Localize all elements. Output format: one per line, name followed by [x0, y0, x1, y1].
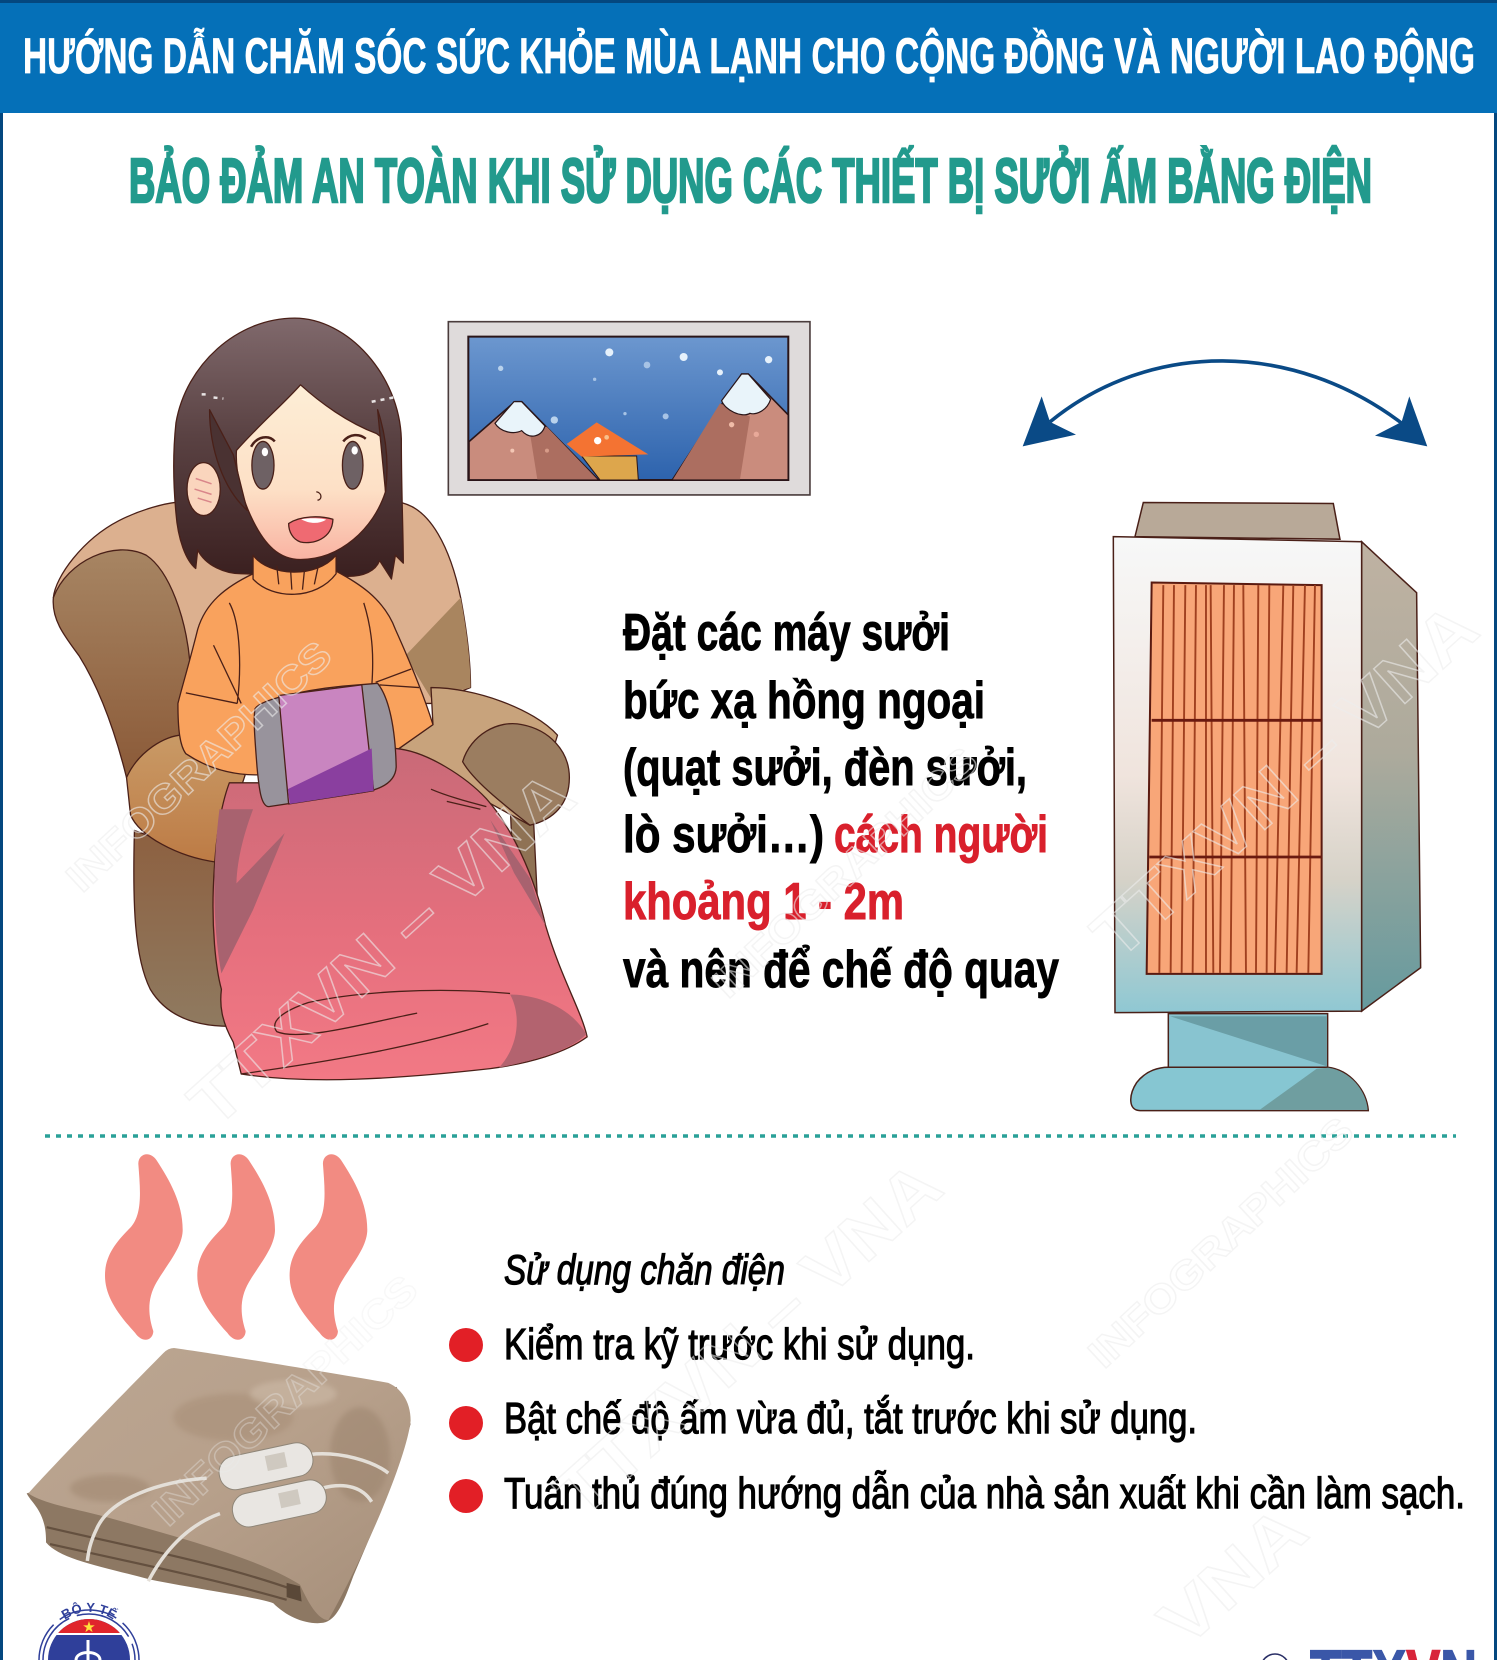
snow dots [498, 348, 772, 424]
list heading: Sử dụng chăn điện [504, 1246, 785, 1293]
icon: heat waves [105, 1154, 367, 1340]
watermarks: INFOGRAPHICS [58, 633, 340, 901]
woman [174, 318, 433, 775]
item 1: Kiểm tra kỹ trước khi sử dụng. [504, 1320, 975, 1369]
wall painting [448, 322, 810, 495]
mouth [289, 517, 333, 543]
instruction list: electric blanket [449, 1246, 1465, 1518]
instruction text: infrared heaters: cách người [834, 806, 1048, 864]
watermarks: INFOGRAPHICS [704, 739, 986, 1007]
logo: Bo Y Te: BỘ Y TẾ [61, 1602, 118, 1620]
instruction text: infrared heaters: Đặt các máy sưởi [623, 604, 950, 662]
hand warmer muff [254, 683, 396, 807]
logo: Bo Y Te: ★ [82, 1619, 96, 1636]
header banner [0, 0, 1497, 113]
instruction text: infrared heaters: lò sưởi…) [623, 806, 824, 864]
item 2: Bật chế độ ấm vừa đủ, tắt trước khi sử dụng. [504, 1394, 1197, 1443]
instruction text: infrared heaters: khoảng 1 - 2m [623, 873, 904, 931]
watermarks: TTXVN – VNA [174, 757, 589, 1141]
watermarks: TTXVN – VNA [541, 1147, 956, 1531]
instruction text: infrared heaters [623, 604, 1059, 999]
house [582, 456, 638, 480]
instruction text: infrared heaters: và nên để chế độ quay [623, 941, 1059, 999]
armchair [53, 502, 569, 1026]
watermarks [58, 589, 1492, 1660]
illustration: infrared heater [1113, 502, 1421, 1111]
rotation arrow [1023, 361, 1427, 446]
blanket on lap [213, 748, 587, 1080]
photo: electric blanket with controllers [27, 1348, 411, 1623]
logo: Bo Y Te [38, 1602, 140, 1660]
watermarks: TTXVN – VNA [1077, 589, 1492, 973]
controllers [216, 1440, 329, 1530]
instruction text: infrared heaters: bức xạ hồng ngoại [623, 672, 985, 730]
controller cords [87, 1454, 388, 1581]
illustration: woman on armchair with blanket [53, 318, 587, 1080]
right mountain [672, 374, 788, 480]
instruction text: infrared heaters: (quạt sưởi, đèn sưởi, [623, 739, 1027, 797]
watermarks: VNA [1144, 1491, 1321, 1660]
eyes [252, 441, 274, 489]
logo: TTXVN [1262, 1650, 1474, 1660]
watermarks: INFOGRAPHICS [1080, 1109, 1362, 1377]
stand [1168, 1014, 1328, 1067]
heater grill [1147, 583, 1322, 974]
left mountain [469, 402, 598, 480]
watermarks: INFOGRAPHICS [144, 1267, 426, 1535]
